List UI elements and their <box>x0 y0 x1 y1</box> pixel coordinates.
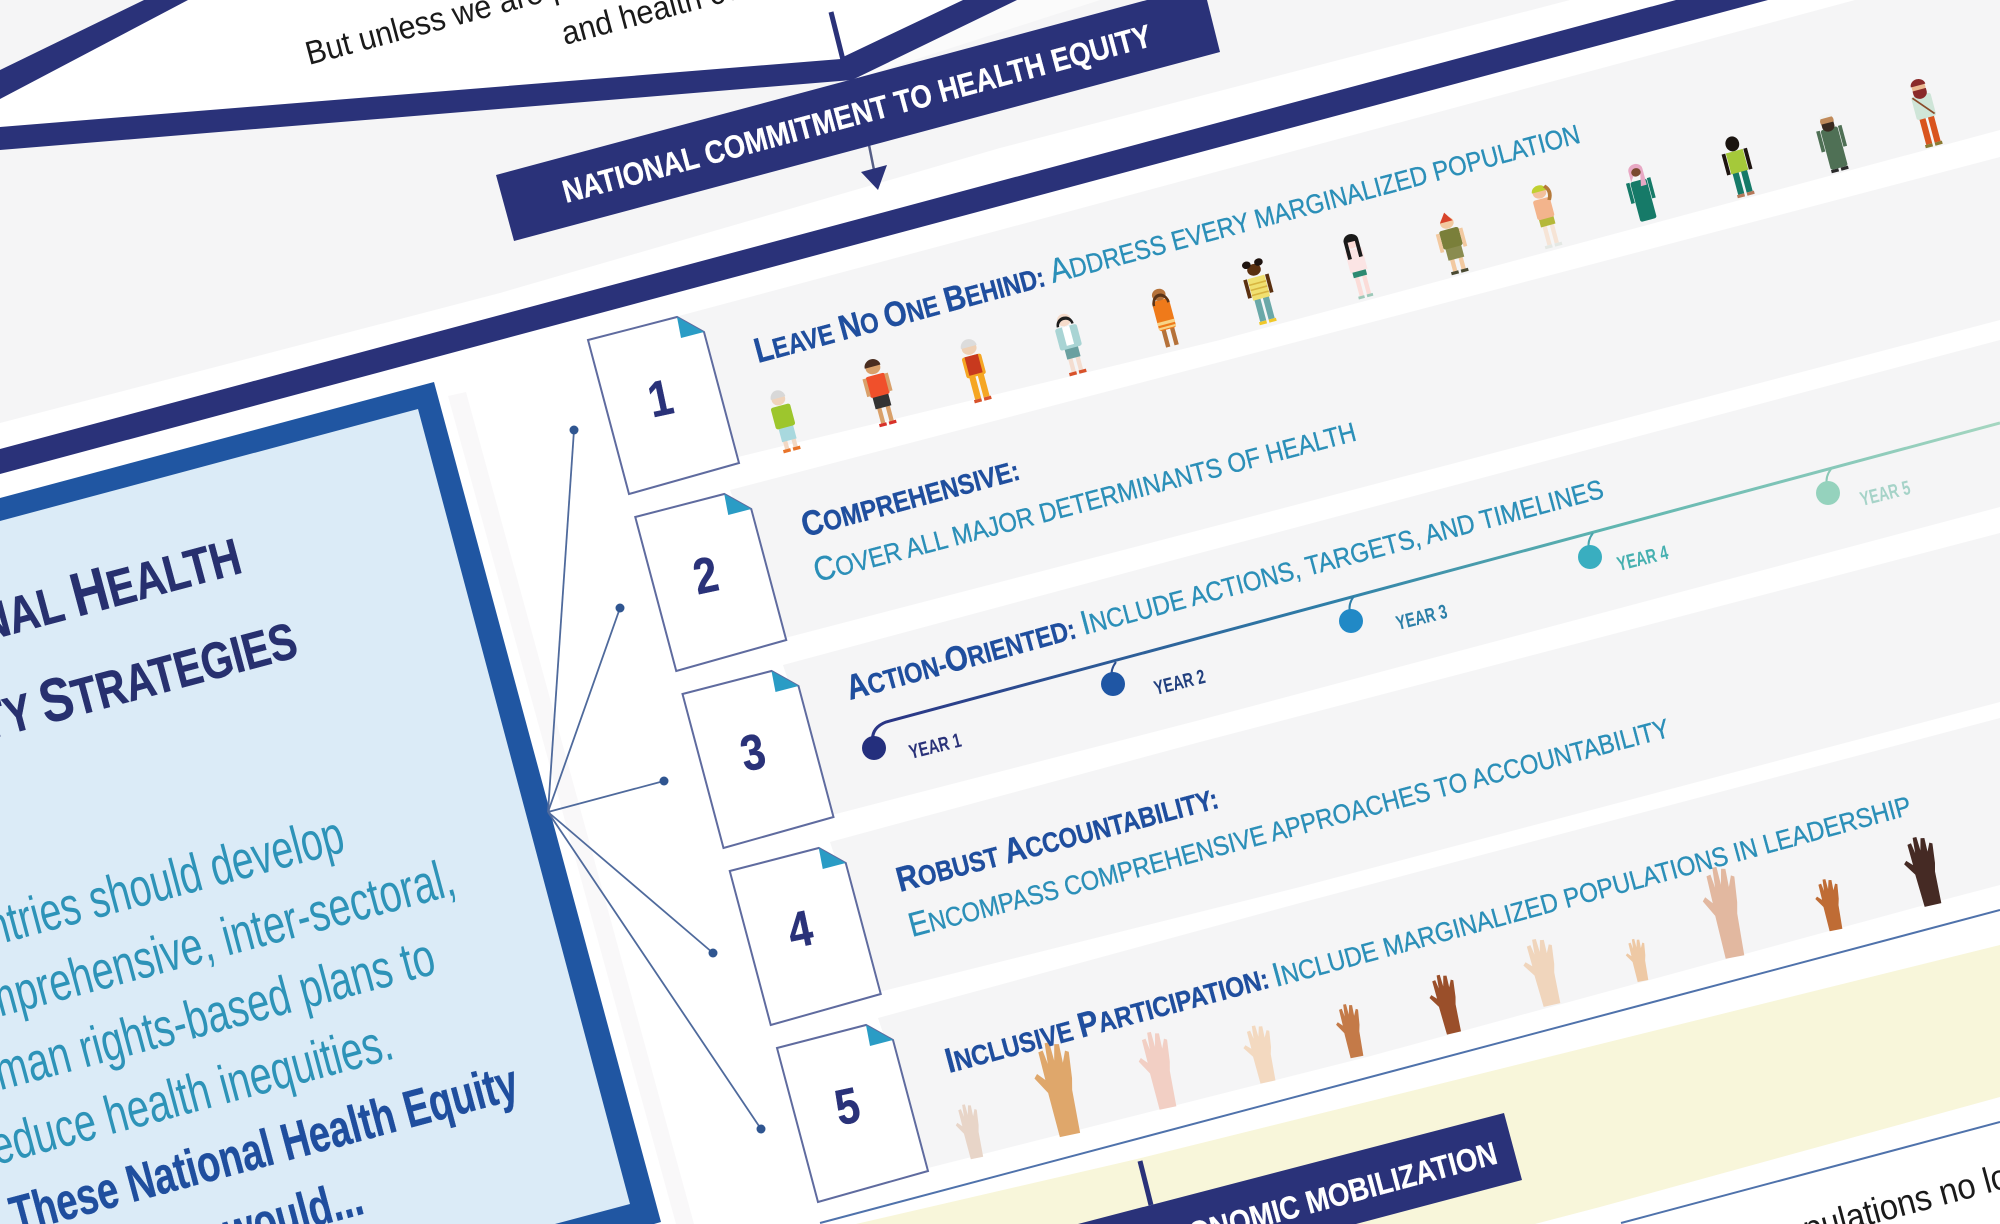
card 5: 5 <box>830 1076 865 1136</box>
arrow below commitment banner <box>861 140 887 190</box>
person 1 <box>766 388 802 454</box>
hand 4 <box>1239 1023 1280 1086</box>
row 5 description: INCLUDE MARGINALIZED POPULATIONS IN LEADERSHIP <box>1268 785 1915 995</box>
person 3 <box>957 337 993 404</box>
row 1 panel: leave no one behind <box>675 0 2000 457</box>
person 5 <box>1149 287 1181 348</box>
row 4 panel: robust accountability <box>830 533 2000 992</box>
row 2 panel: comprehensive <box>730 157 2000 638</box>
row 2 heading: COMPREHENSIVE: <box>797 449 1023 545</box>
cream panel: economic mobilization <box>856 945 2000 1224</box>
section rule above cream panel <box>820 910 2000 1223</box>
hand 11 <box>1899 834 1946 909</box>
card 2 <box>635 494 786 671</box>
connector lines from panel to the five strategies <box>548 426 766 1134</box>
year 2: YEAR 2 <box>1152 666 1208 700</box>
person 10 <box>1623 161 1659 223</box>
card 3 <box>682 671 834 848</box>
card 3: 3 <box>736 722 770 782</box>
row 5 heading: INCLUSIVE PARTICIPATION: <box>941 957 1273 1081</box>
person 8 <box>1433 210 1472 276</box>
raised hands <box>952 834 1946 1161</box>
row 5 panel: inclusive participation <box>878 718 2000 1168</box>
row 1 description: ADDRESS EVERY MARGINALIZED POPULATION <box>1045 113 1584 291</box>
year 3: YEAR 3 <box>1394 601 1450 635</box>
person 4 <box>1051 311 1089 377</box>
row 3 heading: ACTION-ORIENTED: <box>842 608 1080 708</box>
year 1: YEAR 1 <box>907 730 964 764</box>
row 4 description: ENCOMPASS COMPREHENSIVE APPROACHES TO ACCOUNTABILITY <box>904 707 1673 945</box>
row 1 heading: LEAVE NO ONE BEHIND: <box>750 256 1049 371</box>
person 6 <box>1241 257 1279 326</box>
year 1 <box>862 730 964 764</box>
card 4 <box>730 848 881 1025</box>
card 2: 2 <box>688 545 723 605</box>
timeline <box>862 423 2000 764</box>
panel: national health equity strategies <box>0 382 661 1224</box>
panel heading <box>0 519 303 780</box>
top callout text <box>301 0 835 72</box>
person 2 <box>860 356 899 428</box>
top callout chevron <box>0 0 1100 150</box>
card 1 <box>588 317 739 494</box>
person 13 <box>1907 77 1944 149</box>
lower section rule <box>1621 1122 2000 1223</box>
card 1: 1 <box>643 368 678 428</box>
panel body text <box>0 803 525 1224</box>
person 11 <box>1719 134 1757 199</box>
background: upper grey section <box>0 0 1570 423</box>
hand 10 <box>1812 877 1846 933</box>
person 9 <box>1529 183 1563 249</box>
people illustrations <box>766 77 1944 454</box>
banner: economic mobilization <box>1078 1113 1522 1224</box>
row 2 description: COVER ALL MAJOR DETERMINANTS OF HEALTH <box>809 411 1360 590</box>
connector tick from callout <box>831 12 843 60</box>
heavy divider band <box>0 0 1768 474</box>
year 4 <box>1578 533 1671 576</box>
year 4: YEAR 4 <box>1615 542 1671 576</box>
year 3 <box>1339 596 1450 635</box>
year 2 <box>1101 662 1208 700</box>
person 12 <box>1814 111 1851 174</box>
year 5 <box>1816 469 1913 511</box>
row 4 heading: ROBUST ACCOUNTABILITY: <box>892 777 1222 900</box>
row 3 description: INCLUDE ACTIONS, TARGETS, AND TIMELINES <box>1076 468 1607 643</box>
row 3 panel: action-oriented <box>783 340 2000 815</box>
hand 7 <box>1518 936 1565 1009</box>
card 5 <box>777 1025 928 1202</box>
card 4: 4 <box>783 899 818 959</box>
hand 9 <box>1697 864 1749 961</box>
hand 5 <box>1333 1002 1367 1060</box>
person 7 <box>1341 232 1375 300</box>
hand 2 <box>1028 1039 1086 1140</box>
hand 3 <box>1133 1029 1181 1112</box>
hand 8 <box>1623 937 1651 983</box>
connector tick <box>1140 1161 1151 1205</box>
panel shadow <box>448 392 694 1224</box>
hand 6 <box>1425 972 1465 1037</box>
year 5: YEAR 5 <box>1858 477 1913 511</box>
hand 1 <box>952 1102 987 1161</box>
